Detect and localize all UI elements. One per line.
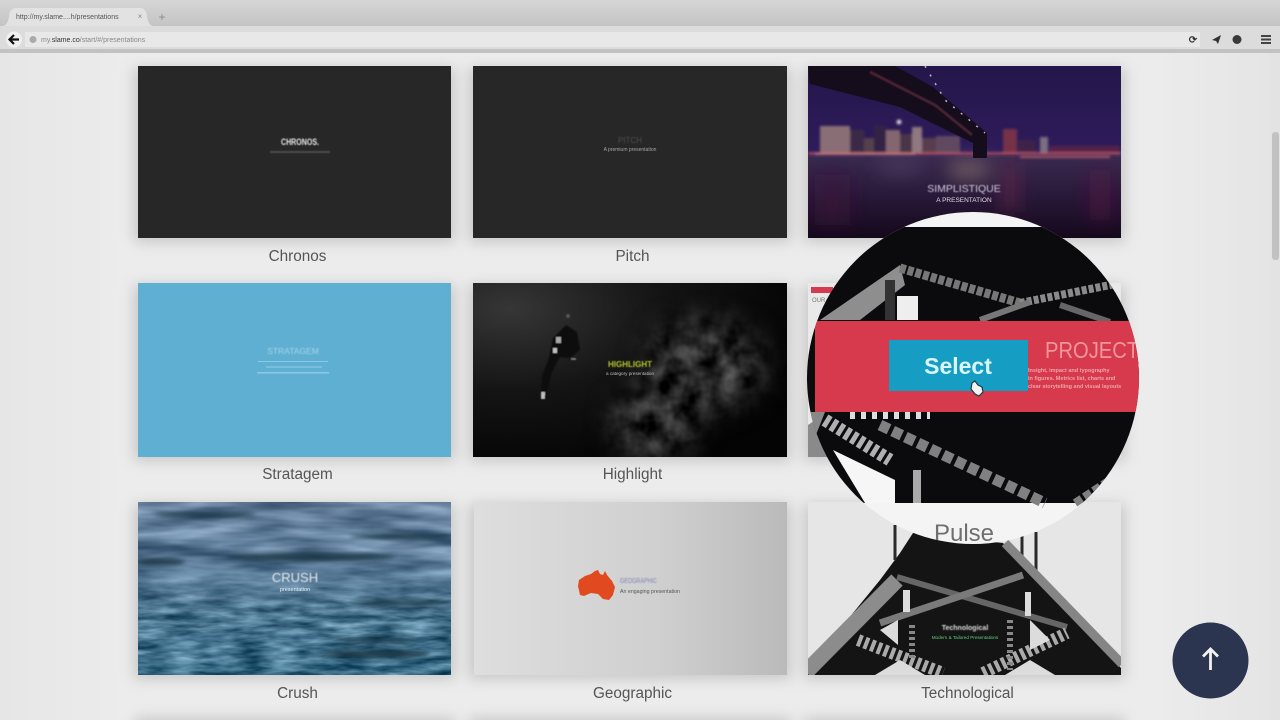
thumbnail: Chronos bbox=[138, 66, 451, 238]
magnified photo bbox=[800, 227, 1150, 503]
card: Chronos bbox=[138, 66, 451, 265]
thumbnail: ocean fine ripples bbox=[138, 560, 451, 675]
thumbnail subtitle: Highlight: a category presentation bbox=[606, 371, 654, 376]
thumbnail: night sky bbox=[808, 66, 1121, 156]
scrollbar track bbox=[1270, 53, 1280, 720]
thumbnail title: Crush: CRUSH bbox=[272, 570, 318, 585]
thumbnail title: Simplistique: SIMPLISTIQUE bbox=[927, 183, 1001, 195]
thumbnail: Pulse background bbox=[808, 283, 1121, 457]
thumbnail subtitle: Pitch: A premium presentation bbox=[604, 147, 657, 153]
icon: send bbox=[1212, 35, 1221, 44]
magnifier callout bbox=[800, 205, 1150, 550]
card: Crush bbox=[135, 502, 451, 702]
thumbnail title: Chronos: CHRONOS. bbox=[281, 137, 319, 148]
card label: Highlight: Highlight bbox=[603, 466, 663, 483]
card label: Stratagem: Stratagem bbox=[262, 466, 333, 483]
thumbnail title: Highlight: HIGHLIGHT bbox=[608, 360, 652, 369]
site icon bbox=[30, 36, 36, 43]
card label: Technological: Technological bbox=[921, 685, 1014, 702]
browser chrome bbox=[0, 0, 1280, 53]
card: Stratagem bbox=[138, 283, 451, 483]
scrollbar bbox=[1270, 53, 1280, 720]
thumbnail: Stratagem bbox=[138, 283, 451, 457]
card: Pulse (under magnifier) bbox=[808, 283, 1121, 457]
magnified body text bbox=[1028, 368, 1121, 390]
toolbar bbox=[0, 26, 1280, 49]
back arrow bbox=[10, 35, 19, 44]
back button bbox=[6, 32, 22, 48]
magnified girders, lower bbox=[808, 412, 1125, 503]
thumbnail subtitle: Crush: presentation bbox=[280, 587, 310, 593]
thumbnail rules and subtitle bbox=[257, 361, 329, 374]
card label: Crush: Crush bbox=[277, 685, 318, 702]
active tab bbox=[3, 8, 153, 26]
tower verticals bbox=[895, 525, 1036, 570]
card shadows bbox=[134, 68, 1125, 720]
magnified title: PROJECT I bbox=[1045, 337, 1150, 363]
thumbnail title: Geographic: GEOGRAPHIC bbox=[620, 576, 657, 585]
tab title: http://my.slame....h/presentations bbox=[16, 14, 119, 21]
card label: Pitch: Pitch bbox=[615, 248, 650, 265]
thumbnail subtitle: Geographic: An engaging presentation bbox=[620, 589, 680, 595]
select button bbox=[889, 340, 1028, 391]
card: Simplistique bbox=[808, 66, 1121, 238]
tower body bbox=[808, 533, 1121, 675]
thumbnail subtitle: Chronos bbox=[270, 151, 330, 153]
thumbnail: ocean texture bbox=[138, 502, 451, 675]
card: Technological bbox=[806, 502, 1122, 675]
thumbnail: ocean tint bbox=[138, 502, 451, 675]
magnifier background bbox=[807, 212, 1080, 544]
scrollbar thumb bbox=[1272, 132, 1279, 260]
card: Geographic bbox=[474, 502, 787, 702]
icon: hand cursor bbox=[971, 381, 983, 396]
thumbnail subtitle: Technological: Modern & Tailored Presentations bbox=[932, 635, 999, 640]
bridge bbox=[808, 66, 987, 158]
thumbnail: girder corner bbox=[808, 422, 827, 457]
tab strip bbox=[0, 0, 1280, 26]
button label: Select bbox=[924, 353, 992, 379]
tower girders bbox=[806, 543, 1122, 673]
card label: Geographic: Geographic bbox=[593, 685, 672, 702]
thumbnail: small text: OUR bbox=[812, 298, 826, 304]
thumbnail: red tab bbox=[811, 287, 833, 293]
magnified red band bbox=[815, 321, 1145, 412]
icon: extension bbox=[1232, 35, 1242, 44]
thumbnail: water bbox=[808, 156, 1121, 238]
icon: up arrow bbox=[1203, 649, 1218, 670]
icon: Australia map bbox=[578, 570, 615, 600]
thumbnail title: Technological: Technological bbox=[942, 625, 988, 632]
magnified girders, upper bbox=[820, 265, 1120, 322]
address bar bbox=[25, 32, 1200, 47]
thumbnail: sky bbox=[808, 502, 1121, 675]
magnified body text: clear storytelling and visual layouts bbox=[1028, 384, 1121, 390]
dark swells bbox=[135, 512, 450, 659]
thumbnail subtitle: Simplistique: A PRESENTATION bbox=[936, 197, 992, 204]
rock texture bbox=[613, 320, 765, 461]
card: Pitch bbox=[473, 66, 787, 265]
magnified label: Pulse: Pulse bbox=[934, 520, 994, 547]
url: my.slame.co/start/#/presentations bbox=[41, 37, 146, 44]
thumbnail: dark water bbox=[473, 283, 787, 457]
thumbnail: Pitch bbox=[473, 66, 787, 238]
button body bbox=[889, 340, 1028, 391]
back to top button bbox=[1172, 622, 1248, 698]
card label: Chronos: Chronos bbox=[269, 248, 327, 265]
magnified body text: in figures. Metrics list, charts and bbox=[1028, 376, 1115, 382]
thumbnail title: Stratagem: STRATAGEM bbox=[267, 346, 319, 356]
thumbnail title: Pitch: PITCH bbox=[618, 136, 642, 145]
tab close: × bbox=[138, 12, 143, 21]
button circle bbox=[1172, 622, 1248, 698]
skyline bbox=[808, 120, 1121, 158]
diver bbox=[541, 314, 580, 399]
new tab button: + bbox=[158, 10, 166, 24]
icon: reload: ⟳ bbox=[1189, 35, 1198, 46]
icon: menu bbox=[1261, 35, 1271, 44]
tower light gaps bbox=[875, 590, 1055, 675]
thumbnail: Geographic bbox=[474, 502, 787, 675]
card: Highlight bbox=[473, 283, 787, 461]
toolbar edge bbox=[0, 49, 1280, 53]
water reflections bbox=[815, 160, 1110, 225]
magnified body text: Insight, impact and typography bbox=[1028, 368, 1111, 374]
